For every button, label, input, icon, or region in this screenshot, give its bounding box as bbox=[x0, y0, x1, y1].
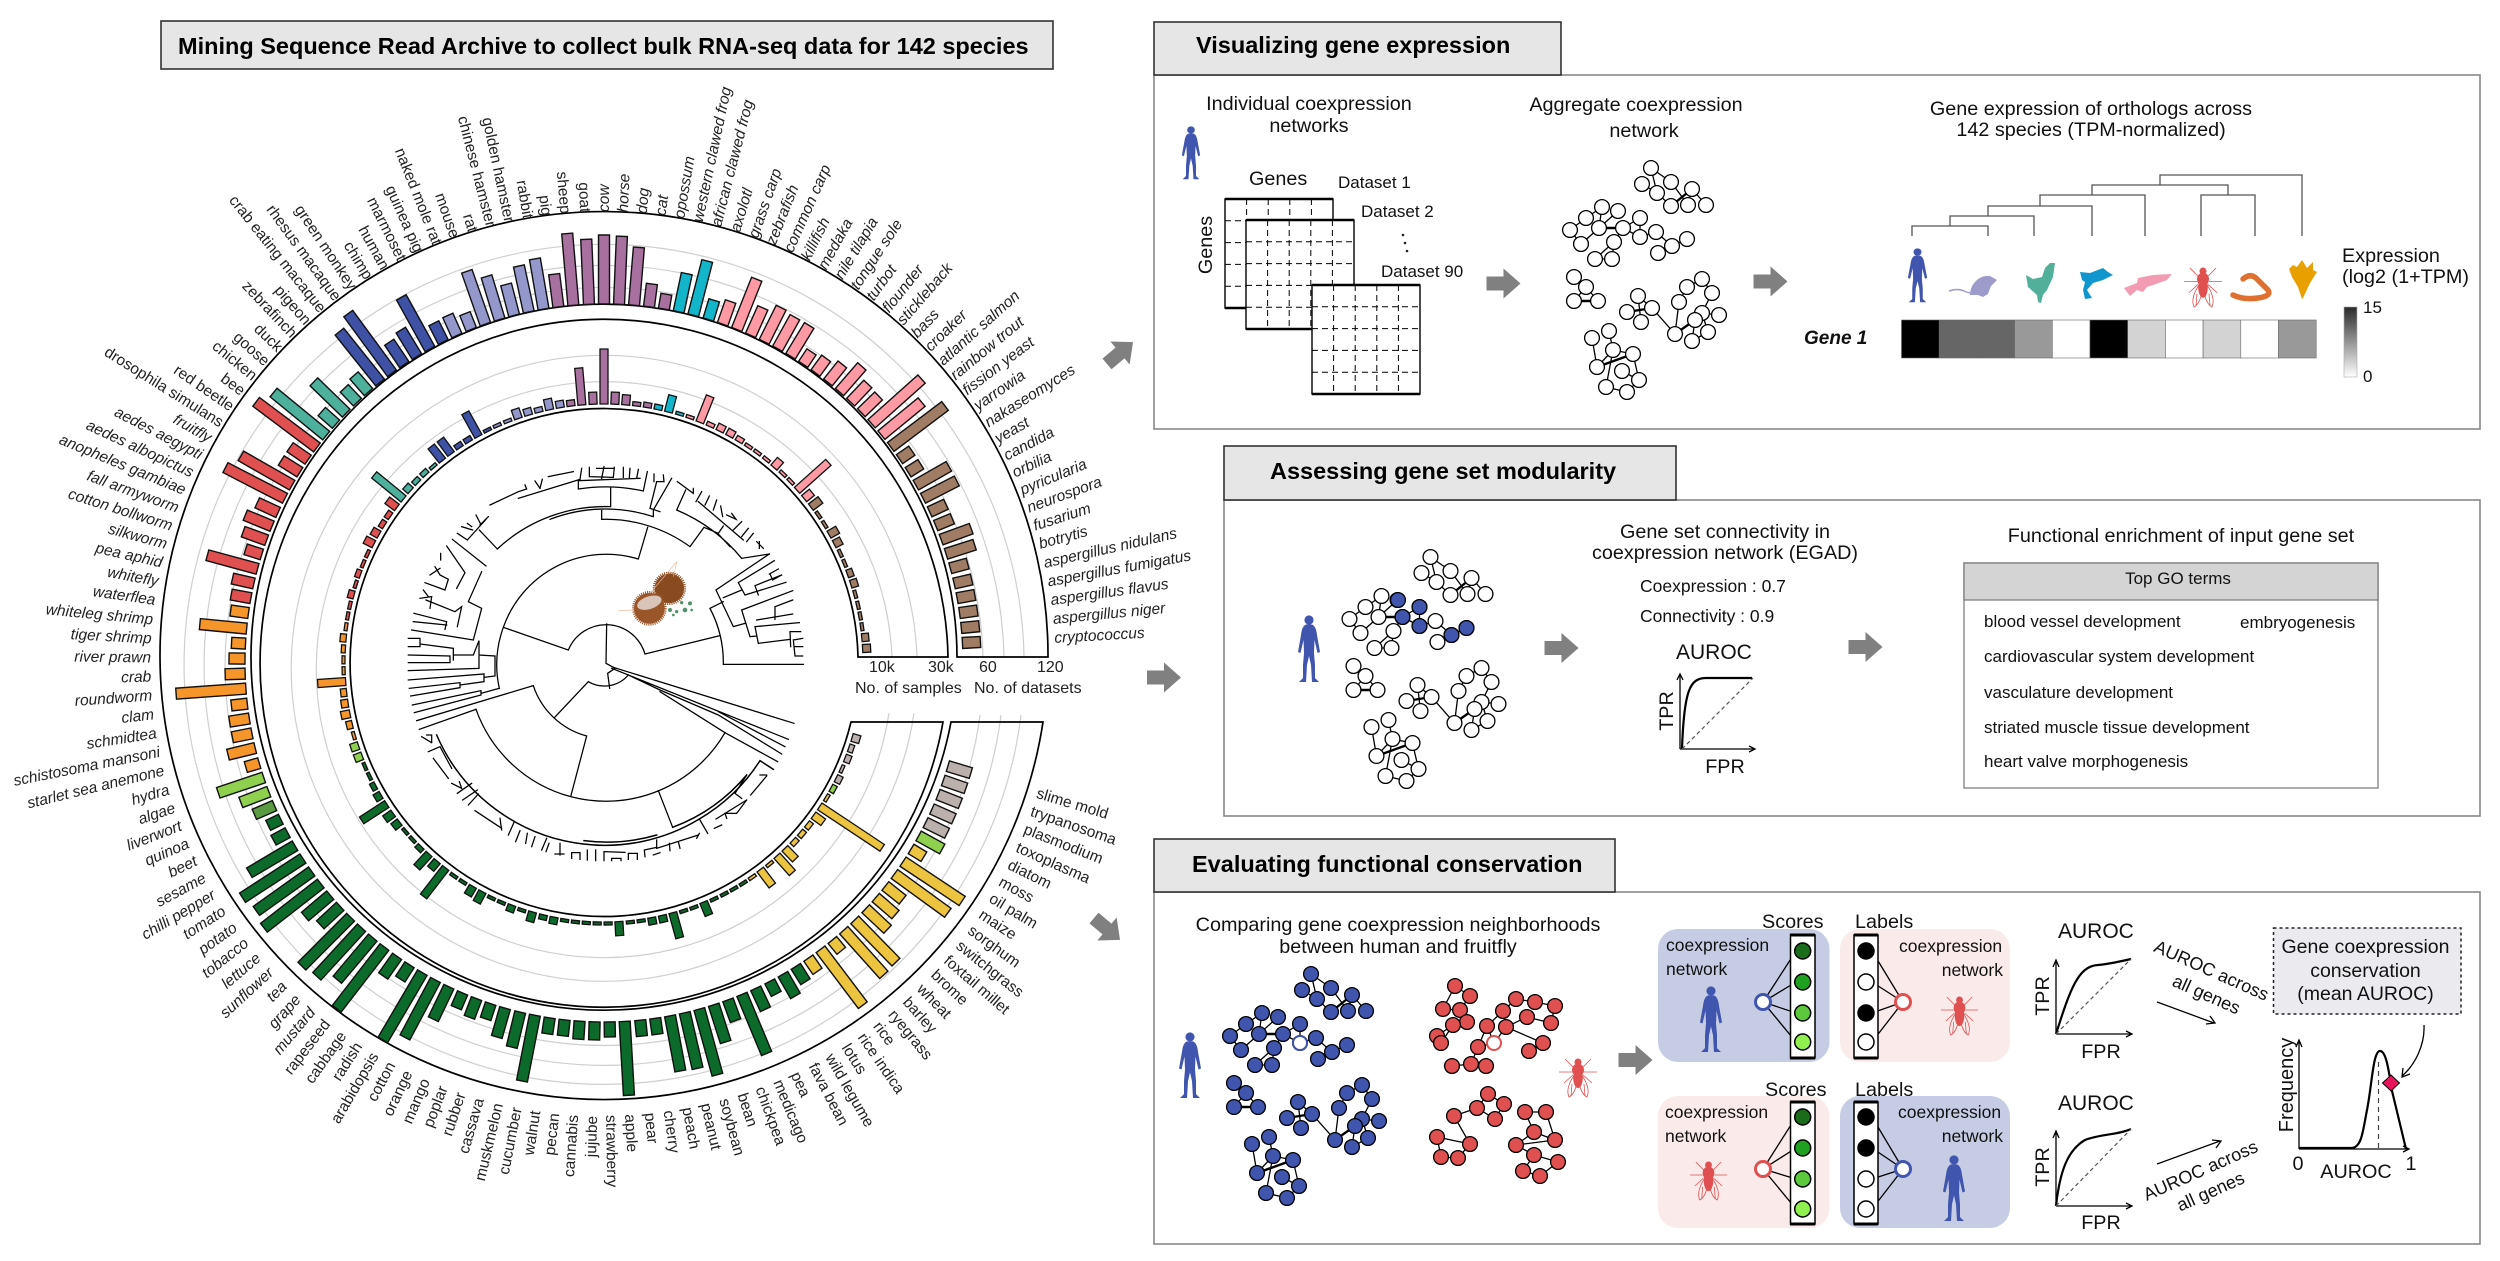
network with highlighted gene set bbox=[1342, 550, 1506, 788]
species labels: bottom right: slime mold bbox=[1034, 785, 1110, 823]
icon: human bbox=[1182, 126, 1200, 179]
inner bars: number of samples bbox=[317, 349, 884, 939]
species labels: left side: algae bbox=[136, 800, 178, 828]
species labels: left side: tomato bbox=[180, 903, 229, 943]
text: gene 1: Gene 1 bbox=[1804, 328, 1867, 349]
arrow bbox=[1848, 632, 1882, 662]
heading: visualizing bbox=[1154, 22, 1561, 75]
species labels: left side: silkworm bbox=[106, 521, 169, 553]
species labels: right side: neurospora bbox=[1025, 473, 1105, 516]
species labels: left side: chimp bbox=[340, 239, 376, 283]
species labels: left side: zebrafinch bbox=[238, 278, 300, 341]
comparison: fly scores, human labels: network bbox=[1942, 1126, 2003, 1146]
ROC chart: top: TPR bbox=[2032, 976, 2054, 1016]
table: top GO terms: heart valve morphogenesis bbox=[1984, 752, 2188, 771]
species labels: right side: botrytis bbox=[1037, 523, 1090, 553]
heading: modularity: Assessing gene set modularity bbox=[1270, 458, 1616, 484]
species labels: left side: grape bbox=[265, 991, 305, 1032]
text: scores: Connectivity : 0.9 bbox=[1640, 606, 1774, 626]
text: aggregate network: network bbox=[1609, 120, 1679, 142]
arrow: tree to modularity panel bbox=[1147, 662, 1181, 692]
axis labels: samples and datasets ticks: No. of datasets bbox=[974, 680, 1082, 697]
species labels: bottom right: pea bbox=[787, 1069, 813, 1100]
panel: visualizing gene expression bbox=[1154, 22, 2480, 429]
species labels: right side: bass bbox=[908, 306, 943, 341]
text: comparing neighborhoods: Comparing gene coexpression neighborhoods bbox=[1196, 914, 1600, 936]
comparison: human scores, fly labels: network bbox=[1666, 959, 1728, 979]
species labels: right side: opossum bbox=[671, 155, 699, 220]
species labels: left side: poplar bbox=[420, 1084, 452, 1130]
species labels: bottom right: soybean bbox=[715, 1097, 747, 1158]
axis labels: samples and datasets ticks: 60 bbox=[979, 659, 997, 676]
table: top GO terms bbox=[1964, 563, 2378, 788]
species labels: left side: whitefly bbox=[106, 564, 161, 590]
species labels: right side: medaka bbox=[815, 216, 857, 273]
text: comparing neighborhoods: between human and fruitfly bbox=[1279, 936, 1517, 958]
comparison: fly scores, human labels: coexpression bbox=[1665, 1102, 1768, 1122]
species labels: bottom right: rice indica bbox=[854, 1030, 908, 1097]
axis labels: samples and datasets ticks: 120 bbox=[1037, 659, 1064, 676]
network: human neighborhood bbox=[1223, 967, 1386, 1205]
species labels: bottom right: plasmodium bbox=[1021, 821, 1105, 868]
expression legend: 0 bbox=[2363, 367, 2372, 386]
species labels: left side: naked mole rat bbox=[391, 146, 445, 248]
species labels: left side: tea bbox=[263, 978, 291, 1006]
species labels: left side: fall armyworm bbox=[85, 468, 181, 517]
species labels: left side: mouse bbox=[431, 191, 462, 240]
text: connectivity: coexpression network (EGAD) bbox=[1592, 542, 1858, 564]
species labels: left side: bee bbox=[217, 370, 248, 399]
species labels: bottom right: wild legume bbox=[821, 1050, 877, 1130]
species labels: right side: pyricularia bbox=[1017, 456, 1090, 499]
table: top GO terms: Top GO terms bbox=[2125, 569, 2231, 588]
table: top GO terms: striated muscle tissue development bbox=[1984, 718, 2250, 737]
comparison: fly scores, human labels: Scores bbox=[1765, 1079, 1827, 1101]
expression legend: 15 bbox=[2363, 298, 2382, 317]
species labels: left side: muskmelon bbox=[472, 1102, 507, 1183]
reference rings bbox=[184, 244, 1024, 1084]
species labels: right side: nakaseomyces bbox=[982, 361, 1079, 431]
species labels: bottom right: rice bbox=[869, 1019, 898, 1049]
species labels: right side: grass carp bbox=[746, 166, 786, 240]
axis labels: samples and datasets ticks: 10k bbox=[869, 659, 896, 676]
species labels: right side: aspergillus flavus bbox=[1049, 576, 1170, 609]
comparison: fly scores, human labels: Labels bbox=[1855, 1079, 1913, 1101]
chart: AUROC frequency distribution: AUROC bbox=[2320, 1161, 2392, 1183]
icon: human bbox=[1179, 1032, 1201, 1098]
callout: mean AUROC: Gene coexpression bbox=[2281, 936, 2450, 958]
species labels: left side: arabidopsis bbox=[328, 1049, 383, 1127]
species labels: bottom right: chickpea bbox=[752, 1084, 789, 1148]
species labels: left side: rubber bbox=[439, 1090, 470, 1138]
text: connectivity bbox=[1592, 521, 1858, 564]
arrow: tree to visualizing panel bbox=[1097, 331, 1143, 375]
species labels: left side: green monkey bbox=[291, 202, 360, 293]
species labels: right side: stickleback bbox=[894, 259, 957, 329]
species labels: bottom right: barley bbox=[899, 994, 940, 1037]
text and arrow: AUROC across all genes, bottom: all genes bbox=[2174, 1168, 2248, 1215]
table: top GO terms: embryogenesis bbox=[2240, 613, 2355, 632]
species labels: bottom right: bean bbox=[734, 1091, 760, 1129]
species labels: right side: western clawed frog bbox=[690, 85, 735, 224]
species labels: left side: pea aphid bbox=[93, 540, 165, 572]
species labels: left side: red beetle bbox=[170, 362, 237, 415]
species labels: left side: starlet sea anemone bbox=[26, 762, 166, 812]
text: scores: Coexpression : 0.7 bbox=[1640, 576, 1786, 596]
axis labels: samples and datasets ticks: No. of samples bbox=[855, 680, 962, 697]
species labels: left side: crab eating macaque bbox=[225, 192, 329, 316]
ROC chart: TPR bbox=[1656, 691, 1678, 731]
ROC chart bbox=[1656, 641, 1755, 778]
comparison: human scores, fly labels: Labels bbox=[1855, 911, 1913, 933]
heading: mining sequence read archive bbox=[161, 21, 1053, 69]
network: aggregate coexpression bbox=[1563, 161, 1726, 399]
callout: mean AUROC: (mean AUROC) bbox=[2297, 983, 2434, 1005]
species labels: left side: rabbit bbox=[513, 179, 536, 221]
species labels: left side: drosophila simulans bbox=[101, 344, 226, 431]
species labels: bottom right: ryegrass bbox=[885, 1007, 936, 1064]
arrow bbox=[1544, 633, 1578, 663]
species labels: left side: pecan bbox=[542, 1112, 563, 1156]
dataset matrix stack: Dataset 2 bbox=[1361, 202, 1434, 221]
species labels: left side: rapeseed bbox=[281, 1017, 334, 1078]
species labels: bottom right: trypanosoma bbox=[1028, 803, 1119, 849]
text: orthologs: Gene expression of orthologs across bbox=[1930, 98, 2252, 120]
species labels: bottom right: fava bean bbox=[805, 1060, 851, 1128]
species labels: right side: yarrowia bbox=[970, 367, 1029, 415]
species labels: left side: whiteleg shrimp bbox=[45, 601, 154, 629]
arrow: tree to conservation panel bbox=[1084, 907, 1130, 951]
species labels: left side: duck bbox=[250, 321, 286, 356]
species labels: bottom right: maize bbox=[975, 906, 1019, 944]
species labels: bottom right: strawberry bbox=[602, 1115, 620, 1188]
comparison: fly scores, human labels: network bbox=[1665, 1126, 1727, 1146]
ROC chart: AUROC bbox=[1676, 641, 1752, 664]
heatmap strip bbox=[1902, 320, 2316, 358]
species labels: right side: cryptococcus bbox=[1054, 625, 1145, 647]
icons: species silhouettes bbox=[1908, 248, 2317, 307]
species labels: left side: cucumber bbox=[496, 1106, 526, 1176]
species labels: right side: horse bbox=[615, 173, 634, 213]
species labels: right side: zebrafish bbox=[763, 183, 802, 248]
dataset matrix stack: Genes bbox=[1195, 216, 1217, 274]
phylogenetic tree bbox=[408, 467, 803, 861]
comparison: human scores, fly labels: network bbox=[1942, 960, 2003, 980]
species labels: left side: chicken bbox=[209, 338, 260, 384]
comparison: human scores, fly labels: coexpression bbox=[1899, 936, 2002, 956]
species labels: right side: atlantic salmon bbox=[935, 288, 1023, 369]
ROC chart: bottom: FPR bbox=[2081, 1212, 2121, 1234]
species labels: bottom right: wheat bbox=[913, 980, 955, 1023]
chart: AUROC frequency distribution: 0 bbox=[2292, 1153, 2304, 1175]
species labels: left side: jujube bbox=[583, 1116, 601, 1158]
species labels: right side: dog bbox=[634, 187, 653, 214]
species labels: left side: cotton bollworm bbox=[66, 486, 175, 535]
axis labels: samples and datasets ticks: 30k bbox=[928, 659, 955, 676]
species labels: left side: pigeon bbox=[271, 282, 314, 329]
species labels: bottom right: switchgrass bbox=[953, 937, 1027, 1001]
arrow bbox=[1486, 268, 1520, 298]
heading: visualizing: Visualizing gene expression bbox=[1196, 32, 1510, 58]
text and arrow: AUROC across all genes, bottom: AUROC across bbox=[2140, 1136, 2261, 1205]
ROC chart: bottom: AUROC bbox=[2058, 1092, 2134, 1115]
chart: circular bar chart with species labels bbox=[12, 85, 1193, 1188]
species labels: right side: aspergillus niger bbox=[1052, 600, 1167, 628]
species labels: left side: rhesus macaque bbox=[263, 202, 344, 304]
species labels: bottom right: moss bbox=[996, 874, 1037, 907]
species labels: right side: turbot bbox=[863, 261, 901, 304]
callout: mean AUROC: conservation bbox=[2310, 960, 2421, 982]
species labels: left side: goat bbox=[575, 182, 593, 213]
arrow bbox=[1618, 1045, 1652, 1075]
species labels: left side: aedes aegypti bbox=[112, 404, 206, 463]
species labels: left side: chinese hamster bbox=[454, 114, 499, 229]
species labels: right side: croaker bbox=[922, 306, 971, 355]
comparison: human scores, fly labels: coexpression bbox=[1666, 935, 1769, 955]
species labels: right side: common carp bbox=[781, 162, 835, 255]
species labels: bottom right: medicago bbox=[769, 1077, 811, 1146]
species labels: left side: cannabis bbox=[561, 1114, 582, 1177]
species labels: left side: cassava bbox=[456, 1096, 488, 1156]
species labels: left side: hydra bbox=[130, 782, 172, 809]
species labels: left side: cabbage bbox=[302, 1029, 350, 1087]
species labels: right side: yeast bbox=[991, 414, 1033, 448]
species labels: left side: guinea pig bbox=[382, 183, 426, 255]
callout: mean AUROC bbox=[2274, 928, 2461, 1014]
panel: assessing gene set modularity bbox=[1224, 446, 2480, 816]
text: aggregate network bbox=[1529, 94, 1743, 142]
species labels: left side: sheep bbox=[553, 171, 573, 214]
species labels: bottom right: lotus bbox=[838, 1041, 870, 1078]
heading: mining sequence read archive: Mining Sequence Read Archive to collect bulk RNA-seq data for 142 species bbox=[178, 33, 1029, 59]
text: orthologs: 142 species (TPM-normalized) bbox=[1956, 119, 2226, 141]
text and arrow: AUROC across all genes, top: AUROC across bbox=[2151, 936, 2272, 1005]
species labels: right side: cat bbox=[653, 193, 672, 217]
species labels: right side: aspergillus fumigatus bbox=[1046, 547, 1193, 590]
text: connectivity: Gene set connectivity in bbox=[1620, 521, 1830, 543]
text: orthologs bbox=[1930, 98, 2252, 141]
species labels: right side: fission yeast bbox=[959, 333, 1038, 399]
dataset matrix stack: Genes bbox=[1249, 168, 1307, 190]
species labels: right side: nile tilapia bbox=[831, 214, 882, 282]
species labels: left side: schmidtea bbox=[85, 725, 158, 753]
species labels: left side: clam bbox=[120, 706, 155, 727]
text: individual networks: networks bbox=[1269, 115, 1349, 137]
species labels: left side: sesame bbox=[153, 870, 209, 911]
table: top GO terms: vasculature development bbox=[1984, 683, 2173, 702]
species labels: left side: schistosoma mansoni bbox=[12, 744, 162, 790]
species labels: left side: potato bbox=[195, 919, 241, 959]
species labels: left side: tiger shrimp bbox=[70, 626, 152, 648]
expression legend: (log2 (1+TPM) bbox=[2342, 266, 2469, 288]
species labels: left side: anopheles gambiae bbox=[57, 431, 189, 499]
species labels: left side: fruitfly bbox=[170, 411, 216, 447]
species labels: left side: tobacco bbox=[199, 935, 252, 982]
panel: evaluating functional conservation bbox=[1154, 839, 2480, 1244]
ring frames bbox=[160, 212, 1048, 1100]
species labels: left side: liverwort bbox=[124, 818, 185, 854]
species labels: right side: tongue sole bbox=[848, 216, 906, 293]
text: comparing neighborhoods bbox=[1196, 914, 1600, 958]
species labels: left side: rat bbox=[459, 212, 481, 235]
species labels: left side: sunflower bbox=[217, 964, 278, 1022]
species labels: right side: candida bbox=[1001, 424, 1057, 464]
species labels: left side: cotton bbox=[364, 1059, 399, 1104]
dataset matrix stack: Dataset 90 bbox=[1381, 262, 1463, 281]
ROC chart: top bbox=[2032, 920, 2134, 1063]
species labels: right side: killifish bbox=[798, 215, 834, 263]
species labels: right side: flounder bbox=[879, 261, 928, 316]
text: enrichment: Functional enrichment of input gene set bbox=[2008, 525, 2355, 547]
species labels: left side: golden hamster bbox=[478, 116, 517, 224]
species labels: bottom right: foxtail millet bbox=[940, 952, 1013, 1019]
species labels: left side: goose bbox=[230, 329, 273, 370]
dataset matrix stack bbox=[1195, 168, 1463, 394]
species labels: bottom right: peanut bbox=[697, 1102, 724, 1152]
species labels: bottom right: brome bbox=[927, 967, 971, 1009]
network: fruitfly neighborhood bbox=[1430, 979, 1565, 1183]
comparison: human scores, fly labels bbox=[1658, 911, 2010, 1062]
chart: AUROC frequency distribution: Frequency bbox=[2276, 1038, 2298, 1132]
ROC chart: top: AUROC bbox=[2058, 920, 2134, 943]
expression legend bbox=[2342, 245, 2469, 386]
comparison: fly scores, human labels: coexpression bbox=[1898, 1102, 2001, 1122]
species labels: left side: roundworm bbox=[74, 687, 153, 710]
species labels: left side: lettuce bbox=[219, 950, 265, 992]
species labels: right side bbox=[596, 85, 1193, 647]
species labels: left side: mustard bbox=[270, 1003, 320, 1058]
text: scores bbox=[1640, 576, 1786, 626]
species labels: bottom right: diatom bbox=[1005, 857, 1054, 893]
expression legend: Expression bbox=[2342, 245, 2440, 267]
outer bars: number of datasets bbox=[176, 233, 981, 1096]
species labels: left side: orange bbox=[380, 1068, 416, 1119]
species labels: left side: human bbox=[354, 223, 392, 273]
species labels: right side: african clawed frog bbox=[708, 98, 757, 228]
species labels: left side: pig bbox=[535, 194, 555, 217]
species labels: bottom right: peach bbox=[678, 1106, 703, 1150]
species labels: right side: cow bbox=[596, 183, 613, 212]
species labels: right side: rainbow trout bbox=[947, 313, 1028, 384]
comparison: fly scores, human labels bbox=[1658, 1079, 2010, 1228]
species labels: left side bbox=[12, 114, 601, 1183]
ROC chart: top: FPR bbox=[2081, 1041, 2121, 1063]
icon: fungus illustration bbox=[618, 562, 693, 624]
icon: fruitfly bbox=[1559, 1058, 1597, 1097]
species labels: bottom right: pear bbox=[641, 1112, 661, 1144]
species labels: bottom right bbox=[602, 785, 1119, 1188]
species labels: left side: mango bbox=[400, 1076, 434, 1126]
species labels: left side: beet bbox=[166, 853, 201, 881]
species labels: right side: aspergillus nidulans bbox=[1042, 525, 1179, 572]
species dendrogram bbox=[1912, 175, 2302, 236]
species labels: left side: waterflea bbox=[92, 583, 157, 609]
arrow bbox=[1754, 266, 1788, 296]
species labels: bottom right: cherry bbox=[660, 1109, 683, 1155]
ROC chart: bottom bbox=[2032, 1092, 2134, 1234]
text: individual networks bbox=[1206, 93, 1412, 137]
dataset matrix stack: Dataset 1 bbox=[1338, 173, 1411, 192]
ROC chart: bottom: TPR bbox=[2032, 1147, 2054, 1187]
icon: human bbox=[1298, 615, 1320, 682]
species labels: bottom right: sorghum bbox=[964, 922, 1023, 971]
ROC chart: FPR bbox=[1705, 756, 1745, 778]
species labels: bottom right: toxoplasma bbox=[1013, 840, 1093, 887]
text and arrow: AUROC across all genes, top: all genes bbox=[2169, 971, 2243, 1018]
table: top GO terms: blood vessel development bbox=[1984, 612, 2181, 631]
text: aggregate network: Aggregate coexpression bbox=[1529, 94, 1743, 116]
species labels: right side: orbilia bbox=[1010, 448, 1055, 481]
species labels: left side: crab bbox=[121, 668, 152, 686]
comparison: human scores, fly labels: Scores bbox=[1762, 911, 1824, 933]
species labels: left side: river prawn bbox=[74, 649, 151, 666]
heading: conservation bbox=[1154, 839, 1615, 892]
heading: modularity bbox=[1224, 446, 1676, 500]
species labels: left side: chilli pepper bbox=[139, 886, 219, 943]
heading: conservation: Evaluating functional conservation bbox=[1192, 851, 1582, 877]
chart: AUROC frequency distribution: 1 bbox=[2405, 1153, 2417, 1175]
species labels: right side: axolotl bbox=[727, 186, 757, 234]
chart: AUROC frequency distribution bbox=[2276, 1025, 2424, 1183]
species labels: left side: marmoset bbox=[363, 195, 410, 264]
axis labels: samples and datasets ticks bbox=[855, 659, 1082, 697]
species labels: left side: aedes albopictus bbox=[83, 417, 196, 481]
species labels: left side: radish bbox=[329, 1039, 366, 1084]
species labels: bottom right: apple bbox=[621, 1114, 640, 1153]
table: top GO terms: cardiovascular system development bbox=[1984, 647, 2255, 666]
species labels: bottom right: oil palm bbox=[986, 890, 1040, 933]
text: individual networks: Individual coexpression bbox=[1206, 93, 1412, 115]
species labels: left side: quinoa bbox=[142, 835, 192, 870]
species labels: left side: walnut bbox=[521, 1109, 544, 1157]
species labels: right side: fusarium bbox=[1031, 500, 1093, 534]
